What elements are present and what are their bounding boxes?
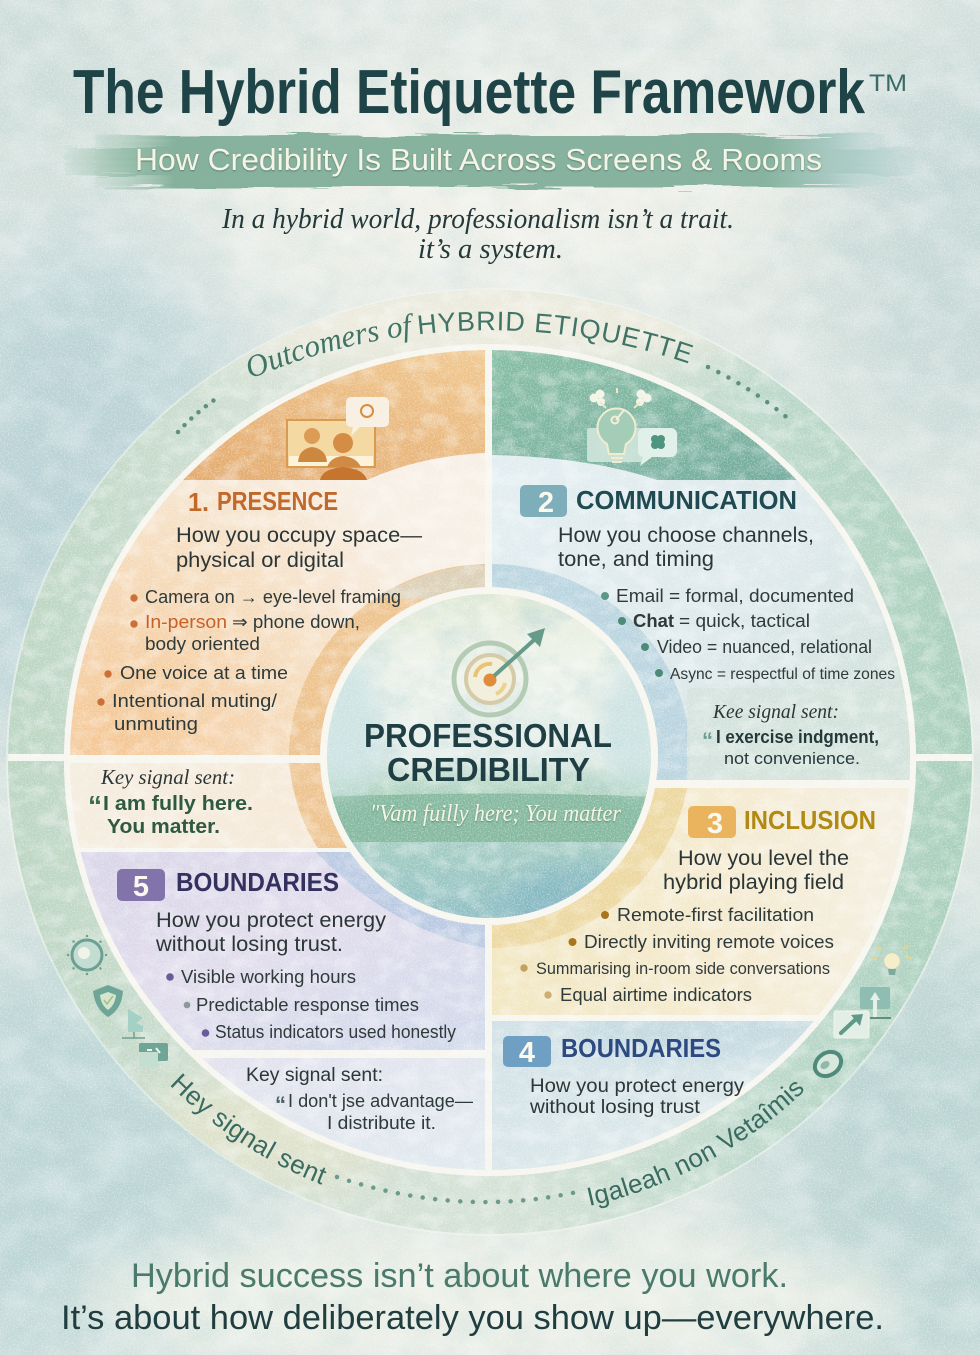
icon: plant sign — [122, 1009, 145, 1038]
key signal: communication: Kee signal sent: — [712, 701, 839, 723]
description: inclusion — [663, 847, 849, 894]
key signal: communication: “ — [702, 728, 713, 753]
heading: presence: 1. — [188, 487, 209, 517]
bullet list: presence — [97, 587, 401, 734]
key signal: presence: I am fully here. — [103, 793, 253, 815]
key signal: boundaries 5 — [246, 1064, 473, 1133]
heading: boundaries 5 — [117, 867, 339, 903]
heading: communication: COMMUNICATION — [576, 485, 797, 515]
bullet list: communication: Chat — [633, 611, 674, 631]
panel: presence — [60, 345, 485, 755]
heading: boundaries 4: BOUNDARIES — [561, 1033, 721, 1063]
subtitle banner — [65, 135, 915, 187]
icon: compass — [68, 936, 106, 974]
panel: key signal, presence — [70, 763, 348, 848]
ring label: top: Outcomers of — [248, 313, 413, 376]
panel: quadrants — [60, 345, 925, 1178]
bullet list: presence: Camera on → eye-level framing — [145, 587, 401, 607]
tagline: it’s a system. — [418, 233, 563, 265]
panel: boundaries 5 — [60, 852, 485, 1050]
centre heading: CREDIBILITY — [387, 751, 590, 788]
heading: boundaries 4: 4 — [519, 1037, 535, 1069]
heading: boundaries 5: BOUNDARIES — [176, 867, 339, 897]
description: presence: physical or digital — [176, 549, 344, 572]
subtitle banner: How Credibility Is Built Across Screens & Rooms — [135, 142, 822, 177]
icon: swirl — [810, 1047, 846, 1081]
closing statement: It’s about how deliberately you show up—everywhere. — [61, 1299, 884, 1337]
description: boundaries 5: How you protect energy — [156, 909, 387, 932]
bullet list: communication: Async = respectful of time zones — [670, 666, 895, 683]
panel: white disc behind quadrants — [64, 344, 916, 1176]
icon: target with arrow — [454, 628, 545, 715]
description: boundaries 4: How you protect energy — [530, 1075, 744, 1097]
heading: boundaries 4 — [503, 1033, 721, 1069]
description: communication — [558, 524, 814, 571]
panel: inclusion — [492, 788, 922, 1015]
icons: right ring — [810, 945, 912, 1081]
icon: shield — [93, 985, 123, 1017]
icon: arrow card — [834, 1011, 869, 1038]
panel: key signal, boundaries — [202, 1058, 485, 1170]
ring label: bottom: Hey signal sent — [170, 1073, 326, 1184]
bullet list: presence: ⇒ phone down, — [232, 612, 360, 632]
key signal: presence: You matter. — [107, 816, 220, 838]
tagline: In a hybrid world, professionalism isn’t a trait. — [221, 203, 734, 235]
section: inclusion text — [520, 805, 876, 1005]
heading: communication — [520, 485, 797, 519]
tagline — [221, 203, 734, 265]
heading: boundaries 5: 5 — [133, 871, 149, 903]
description: communication: How you choose channels, — [558, 524, 814, 547]
bullet list: presence: In-person — [145, 612, 227, 632]
closing statement — [61, 1257, 884, 1337]
key signal: communication: I exercise indgment, — [716, 727, 879, 747]
bullet list: presence: body oriented — [145, 634, 260, 654]
centre quote: "Vam fuilly here; You matter — [370, 801, 622, 827]
section: boundaries 5 text — [117, 867, 473, 1133]
ring label: top — [176, 312, 788, 434]
bullet list: presence: unmuting — [114, 714, 198, 734]
section: presence text — [88, 486, 422, 838]
panel: communication — [492, 345, 925, 780]
key signal: presence — [88, 765, 253, 838]
icons: left ring — [68, 936, 168, 1067]
section: communication text — [520, 485, 895, 768]
heading: inclusion: INCLUSION — [744, 805, 876, 835]
panel: boundaries 4 — [492, 1021, 814, 1170]
icon: monitor up — [860, 987, 891, 1018]
watercolor mottling over the wheel — [8, 290, 972, 1234]
heading: inclusion: 3 — [707, 808, 723, 840]
bullet list: boundaries 5: Predictable response times — [196, 995, 419, 1015]
bullet list: boundaries 5: Status indicators used honestly — [215, 1022, 456, 1042]
heading: presence — [188, 486, 338, 517]
section: boundaries 4 text — [503, 1033, 744, 1118]
panel: centre circle — [320, 587, 658, 925]
bullet list: communication — [601, 586, 895, 683]
key signal: boundaries 5: Key signal sent: — [246, 1064, 383, 1086]
bullet list: communication: Video = nuanced, relational — [657, 637, 872, 657]
bullet list: boundaries 5 — [166, 967, 456, 1042]
description: boundaries 4 — [529, 1075, 744, 1118]
key signal: boundaries 5: I distribute it. — [327, 1113, 436, 1133]
bullet list: presence: Intentional muting/ — [112, 691, 277, 711]
panel: outer ring — [6, 290, 974, 1236]
description: boundaries 4: without losing trust — [529, 1096, 701, 1118]
bullet list: inclusion: Equal airtime indicators — [560, 985, 752, 1005]
description: inclusion: hybrid playing field — [663, 871, 844, 894]
heading: presence: PRESENCE — [217, 486, 338, 516]
bullet list: inclusion: Remote-first facilitation — [617, 905, 814, 925]
key signal: communication — [702, 701, 879, 768]
bullet list: presence: One voice at a time — [120, 663, 288, 683]
bullet list: communication: Email = formal, documented — [616, 586, 854, 606]
centre heading: PROFESSIONAL — [364, 717, 612, 754]
heading: inclusion — [688, 805, 876, 840]
description: boundaries 5: without losing trust. — [155, 933, 343, 956]
title: TM — [869, 70, 907, 97]
icon: chat card — [139, 1043, 168, 1067]
heading: communication: 2 — [538, 487, 554, 519]
key signal: boundaries 5: I don't jse advantage— — [288, 1091, 473, 1111]
key signal: communication: not convenience. — [724, 749, 860, 768]
ring label: top: HYBRID ETIQUETTE — [418, 312, 694, 364]
bullet list: communication: = quick, tactical — [679, 611, 810, 631]
description: communication: tone, and timing — [558, 548, 714, 571]
bullet list: boundaries 5: Visible working hours — [181, 967, 356, 987]
ring label: bottom — [170, 1073, 804, 1208]
description: inclusion: How you level the — [678, 847, 849, 870]
description: boundaries 5 — [155, 909, 387, 956]
bullet list: inclusion — [520, 905, 834, 1005]
closing statement: Hybrid success isn’t about where you work. — [131, 1257, 788, 1295]
icon: light bulb and speech bubble — [587, 388, 677, 466]
description: presence — [176, 524, 422, 572]
bullet list: inclusion: Summarising in-room side conversations — [536, 960, 830, 978]
ring label: bottom: Igaleah non Vetaîmis — [588, 1082, 804, 1208]
key signal: boundaries 5: “ — [275, 1092, 286, 1117]
key signal: presence: Key signal sent: — [100, 765, 235, 789]
key signal: presence: “ — [88, 790, 102, 821]
centre heading — [364, 717, 612, 788]
bullet list: inclusion: Directly inviting remote voices — [584, 932, 834, 952]
icon: small bulb — [872, 945, 912, 975]
icon: video call monitor — [287, 397, 389, 480]
description: presence: How you occupy space— — [176, 524, 422, 547]
